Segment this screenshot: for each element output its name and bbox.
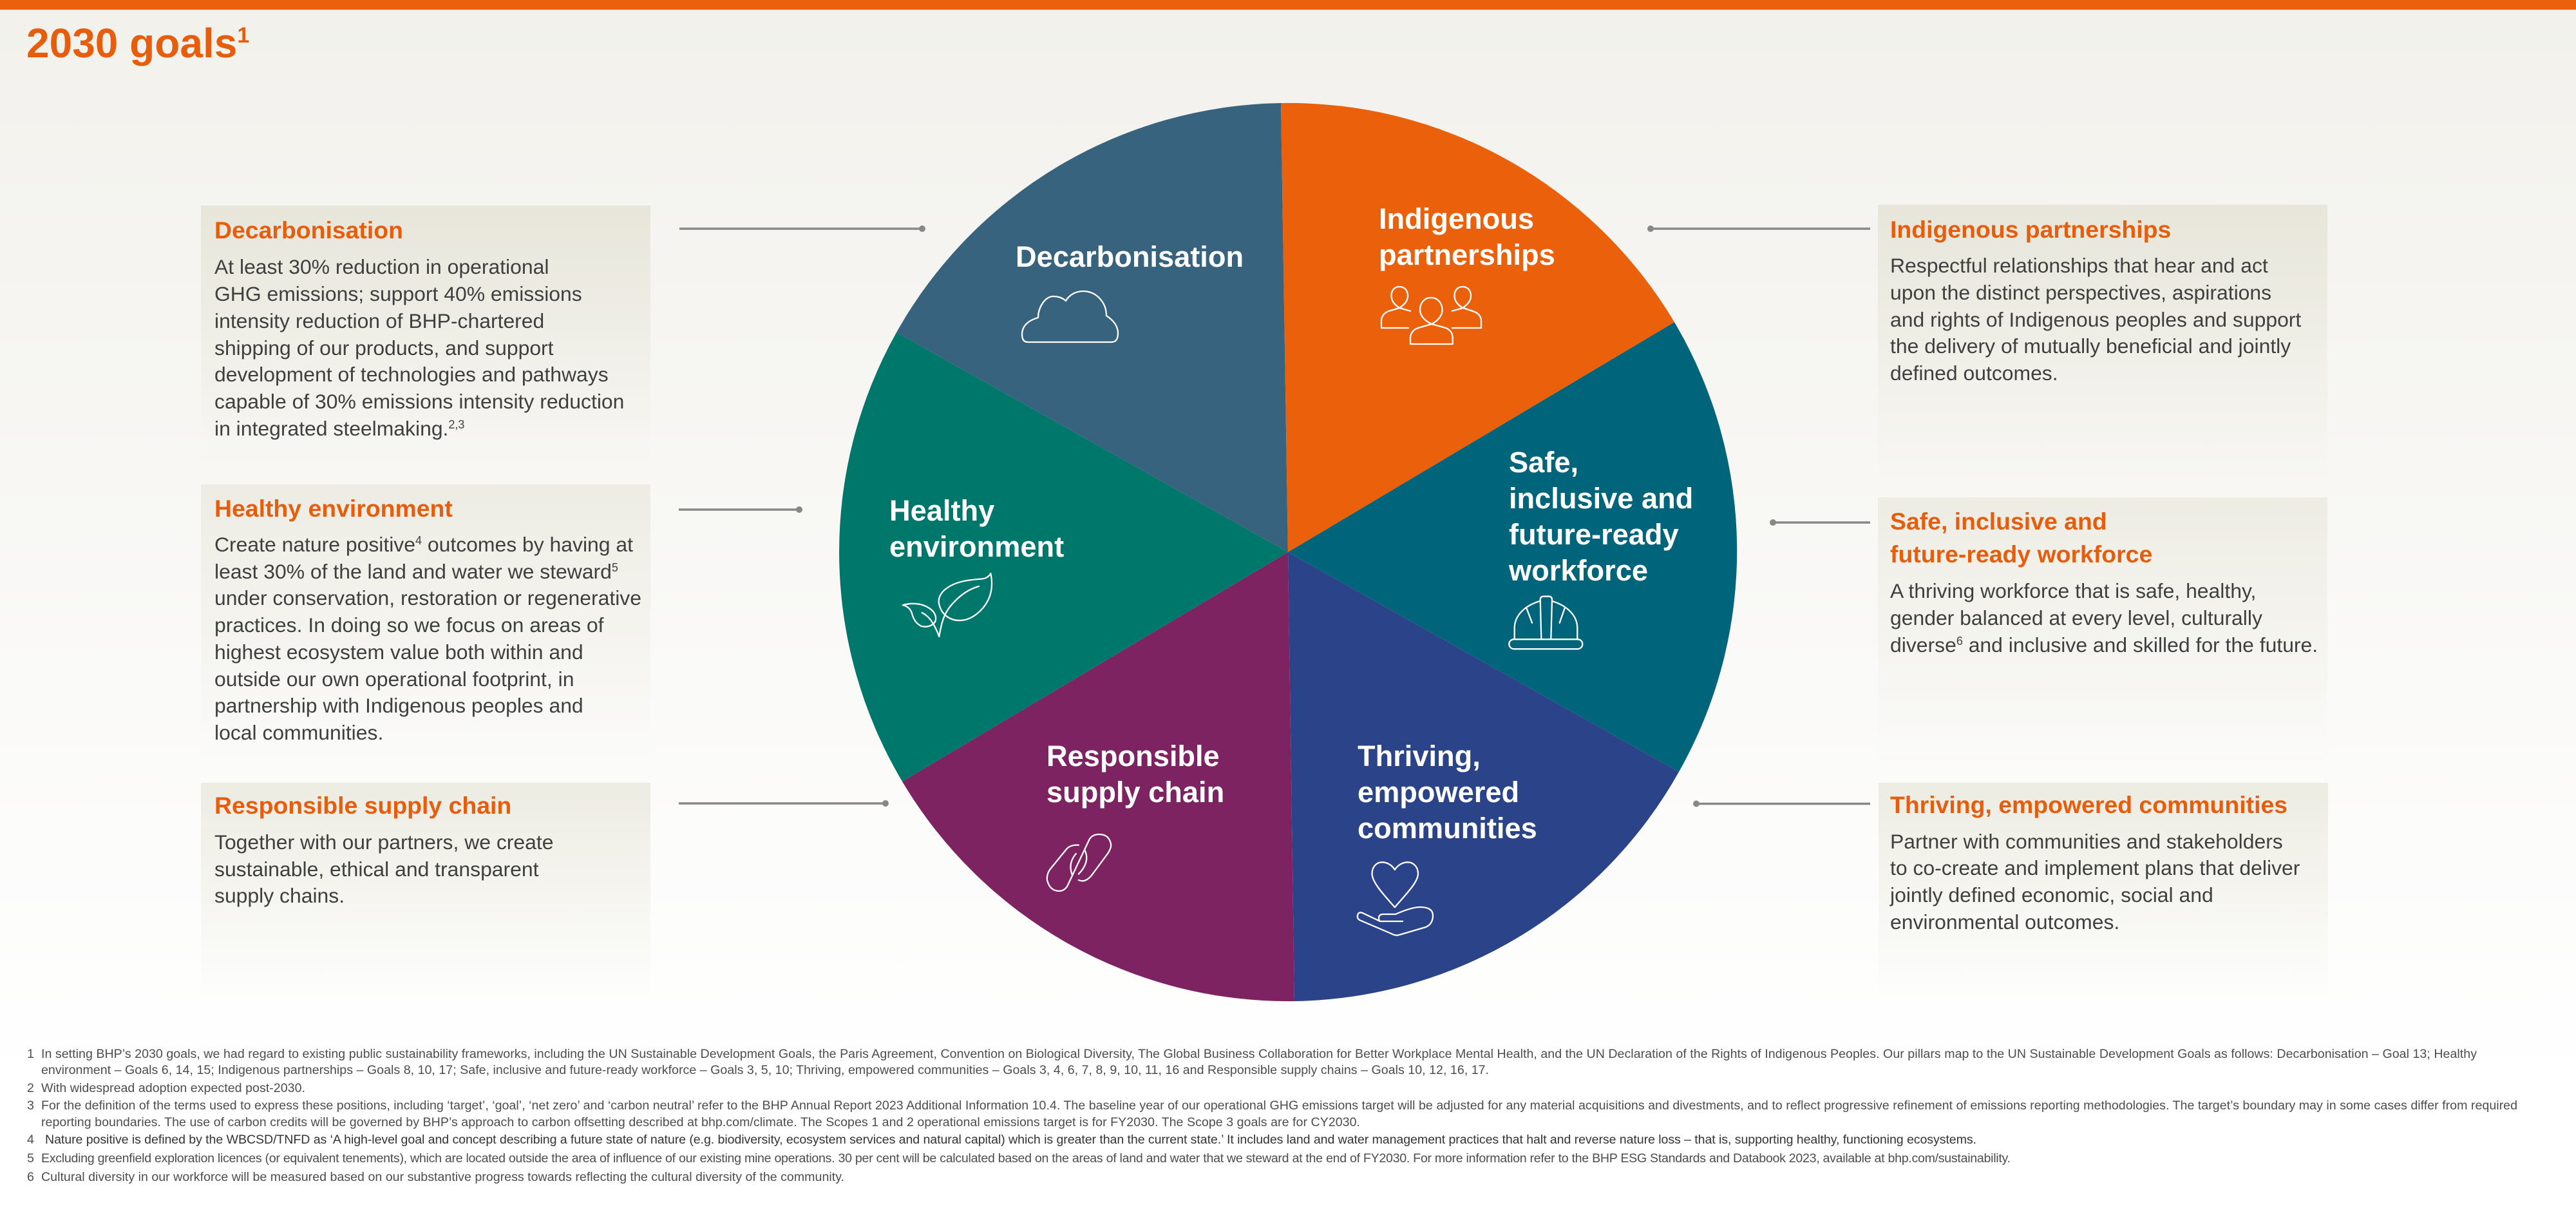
panel: Safe, inclusive and future-ready workforce: 6: [1956, 635, 1963, 647]
footnotes: [27, 1047, 2517, 1184]
panel: Decarbonisation: GHG emissions; support 40% emissions: [214, 282, 582, 305]
icon: heart in hand: [1358, 862, 1433, 935]
title: 2030 goals: [26, 20, 237, 66]
label: Decarbonisation: Decarbonisation: [1016, 240, 1244, 273]
footnotes: environment – Goals 6, 14, 15; Indigenous partnerships – Goals 8, 10, 17; Safe, inclusive and future-ready workforce – Goals 3, 5, 10; Thriving, empowered communities – Goals 3, 4, 6, 7, 8, 9, 10, 11, 16 and Responsible supply chains – Goals 10, 12, 16, 17.: [41, 1063, 1489, 1077]
panel: Thriving, empowered communities: Partner with communities and stakeholders: [1890, 830, 2283, 853]
footnotes: 2: [27, 1081, 34, 1095]
wedge: Thriving, empowered communities: [1288, 552, 1679, 1001]
label: Indigenous partnerships: partnerships: [1379, 238, 1555, 271]
panel: Indigenous partnerships: the delivery of mutually beneficial and jointly: [1890, 334, 2291, 358]
wedge: Safe, inclusive and future-ready workforce: [1288, 322, 1737, 772]
panel: Healthy environment: 5: [612, 561, 618, 574]
panel: Decarbonisation: shipping of our products, and support: [214, 336, 554, 360]
panel: Indigenous partnerships: and rights of Indigenous peoples and support: [1890, 308, 2301, 331]
icon: leaves: [903, 573, 992, 637]
panel: Decarbonisation: 2,3: [448, 418, 464, 431]
panel: Responsible supply chain: sustainable, ethical and transparent: [214, 858, 539, 881]
panel: Thriving, empowered communities: [1879, 783, 2328, 1002]
label: Thriving, empowered communities: communities: [1358, 812, 1537, 845]
connector: Decarbonisation: [679, 225, 925, 232]
panel: Safe, inclusive and future-ready workforce: future-ready workforce: [1890, 541, 2152, 568]
label: Safe, inclusive and future-ready workforce: Safe,: [1509, 446, 1578, 479]
footnotes: 3: [27, 1098, 34, 1113]
panel: Safe, inclusive and future-ready workforce: and inclusive and skilled for the future.: [1963, 633, 2318, 657]
panel: Healthy environment: least 30% of the land and water we steward: [214, 560, 612, 583]
label: Safe, inclusive and future-ready workforce: inclusive and: [1509, 482, 1693, 515]
panel: Indigenous partnerships: Respectful relationships that hear and act: [1890, 254, 2268, 277]
icon: chain links: [1047, 834, 1111, 891]
panel: Indigenous partnerships: upon the distinct perspectives, aspirations: [1890, 281, 2271, 304]
connector: Responsible supply chain: [679, 800, 889, 807]
panel: Healthy environment: local communities.: [214, 721, 383, 744]
footnotes: For the definition of the terms used to express these positions, including ‘target’, ‘goal’, ‘net zero’ and ‘carbon neutral’ refer to the BHP Annual Report 2023 Additional Information 10.4. The baseline year of our operational GHG emissions target will be adjusted for any material acquisitions and divestments, and to reflect progressive refinement of emissions reporting methodologies. The target’s boundary may in some cases differ from required: [41, 1098, 2517, 1113]
footnotes: 4: [27, 1133, 34, 1147]
label: Responsible supply chain: Responsible: [1046, 740, 1220, 772]
panel: Responsible supply chain: supply chains.: [214, 884, 345, 907]
label: Responsible supply chain: [1046, 740, 1224, 809]
panel: Healthy environment: highest ecosystem value both within and: [214, 640, 583, 664]
label: Indigenous partnerships: Indigenous: [1379, 202, 1534, 235]
label: Healthy environment: [889, 494, 1064, 563]
pie chart: six pillars: [839, 103, 1737, 1001]
panel: Healthy environment: practices. In doing so we focus on areas of: [214, 613, 604, 637]
wedge: Healthy environment: [839, 332, 1288, 781]
connector: Healthy environment: [679, 506, 802, 513]
panel: Decarbonisation: [201, 206, 650, 463]
label: Thriving, empowered communities: empowered: [1358, 776, 1519, 809]
top accent bar: [0, 0, 2576, 10]
label: Thriving, empowered communities: [1358, 740, 1537, 845]
label: Thriving, empowered communities: Thriving,: [1358, 740, 1481, 772]
panel: Decarbonisation: intensity reduction of BHP-chartered: [214, 309, 544, 332]
footnotes: 1: [27, 1047, 34, 1061]
panel: Safe, inclusive and future-ready workforce: Safe, inclusive and: [1890, 508, 2107, 535]
panel: Indigenous partnerships: [1878, 205, 2327, 486]
label: Responsible supply chain: supply chain: [1046, 776, 1224, 809]
label: Safe, inclusive and future-ready workforce: [1508, 446, 1693, 587]
footnotes: With widespread adoption expected post-2030.: [41, 1081, 305, 1095]
panel: Thriving, empowered communities: environmental outcomes.: [1890, 910, 2119, 934]
label: Safe, inclusive and future-ready workforce: future-ready: [1509, 518, 1679, 551]
connector: Safe, inclusive and future-ready workforce: [1770, 519, 1870, 526]
panel: Responsible supply chain: [201, 783, 650, 1002]
title: 1: [237, 23, 249, 48]
panel: Decarbonisation: Decarbonisation: [214, 216, 403, 244]
footnotes: Cultural diversity in our workforce will be measured based on our substantive progress towards reflecting the cultural diversity of the community.: [41, 1170, 844, 1184]
label: Safe, inclusive and future-ready workforce: workforce: [1508, 554, 1648, 587]
panel: Healthy environment: partnership with Indigenous peoples and: [214, 694, 583, 717]
panel: Safe, inclusive and future-ready workforce: [1878, 497, 2327, 765]
wedge: Decarbonisation: [896, 103, 1288, 552]
panel: Healthy environment: outside our own operational footprint, in: [214, 667, 574, 691]
panel: Healthy environment: Healthy environment: [214, 495, 453, 522]
footnotes: In setting BHP’s 2030 goals, we had regard to existing public sustainability frameworks, including the UN Sustainable Development Goals, the Paris Agreement, Convention on Biological Diversity, The Global Business Collaboration for Better Workplace Mental Health, and the UN Declaration of the Rights of Indigenous Peoples. Our pillars map to the UN Sustainable Development Goals as follows: Decarbonisation – Goal 13; Healthy: [41, 1047, 2477, 1061]
panel: Thriving, empowered communities: jointly defined economic, social and: [1889, 883, 2213, 906]
panel: Responsible supply chain: Responsible supply chain: [214, 792, 511, 819]
panel: Indigenous partnerships: defined outcomes.: [1890, 361, 2058, 385]
wedge: Indigenous partnerships: [1281, 103, 1674, 552]
panel: Safe, inclusive and future-ready workforce: A thriving workforce that is safe, healthy,: [1890, 579, 2256, 602]
panel: Decarbonisation: development of technologies and pathways: [214, 363, 609, 386]
panel: Responsible supply chain: Together with our partners, we create: [214, 830, 553, 854]
panel: Decarbonisation: in integrated steelmaking.: [214, 417, 448, 440]
footnotes: 6: [27, 1170, 34, 1184]
panel: Healthy environment: under conservation, restoration or regenerative: [214, 586, 641, 609]
footnotes: Excluding greenfield exploration licences (or equivalent tenements), which are located outside the area of influence of our existing mine operations. 30 per cent will be calculated based on the areas of land and water that we steward at the end of FY2030. For more information refer to the BHP ESG Standards and Databook 2023, available at bhp.com/sustainability.: [41, 1151, 2011, 1165]
icon: cloud: [1022, 291, 1118, 342]
panel: Healthy environment: outcomes by having at: [422, 533, 633, 556]
connector: Indigenous partnerships: [1647, 225, 1870, 232]
panel: Healthy environment: [201, 484, 650, 762]
panel: Safe, inclusive and future-ready workforce: gender balanced at every level, culturally: [1890, 606, 2262, 629]
panel: Thriving, empowered communities: to co-create and implement plans that deliver: [1890, 856, 2300, 879]
panel: Indigenous partnerships: Indigenous partnerships: [1890, 216, 2171, 243]
footnotes: 5: [27, 1151, 34, 1165]
panel: Healthy environment: Create nature positive: [214, 533, 415, 556]
wedge: Responsible supply chain: [902, 552, 1294, 1001]
label: Indigenous partnerships: [1379, 202, 1555, 271]
icon: people: [1381, 287, 1481, 344]
icon: hard hat: [1509, 597, 1582, 649]
panel: Safe, inclusive and future-ready workforce: diverse: [1890, 633, 1956, 657]
panel: Decarbonisation: capable of 30% emissions intensity reduction: [214, 390, 624, 413]
footnotes: Nature positive is defined by the WBCSD/TNFD as ‘A high-level goal and concept describing a future state of nature (e.g. biodiversity, ecosystem services and natural capital) which is greater than the current state.’ It includes land and water management practices that halt and reverse nature loss – that is, supporting healthy, functioning ecosystems.: [45, 1133, 1976, 1147]
label: Healthy environment: environment: [889, 530, 1064, 563]
panel: Thriving, empowered communities: Thriving, empowered communities: [1890, 791, 2287, 818]
connector: Thriving, empowered communities: [1693, 800, 1870, 807]
panel: Healthy environment: 4: [415, 534, 422, 547]
footnotes: reporting boundaries. The use of carbon credits will be governed by BHP’s approach to carbon offsetting described at bhp.com/climate. The Scopes 1 and 2 operational emissions target is for FY2030. The Scope 3 goals are for CY2030.: [41, 1115, 1360, 1129]
panel: Decarbonisation: At least 30% reduction in operational: [214, 255, 549, 278]
label: Healthy environment: Healthy: [889, 494, 994, 527]
